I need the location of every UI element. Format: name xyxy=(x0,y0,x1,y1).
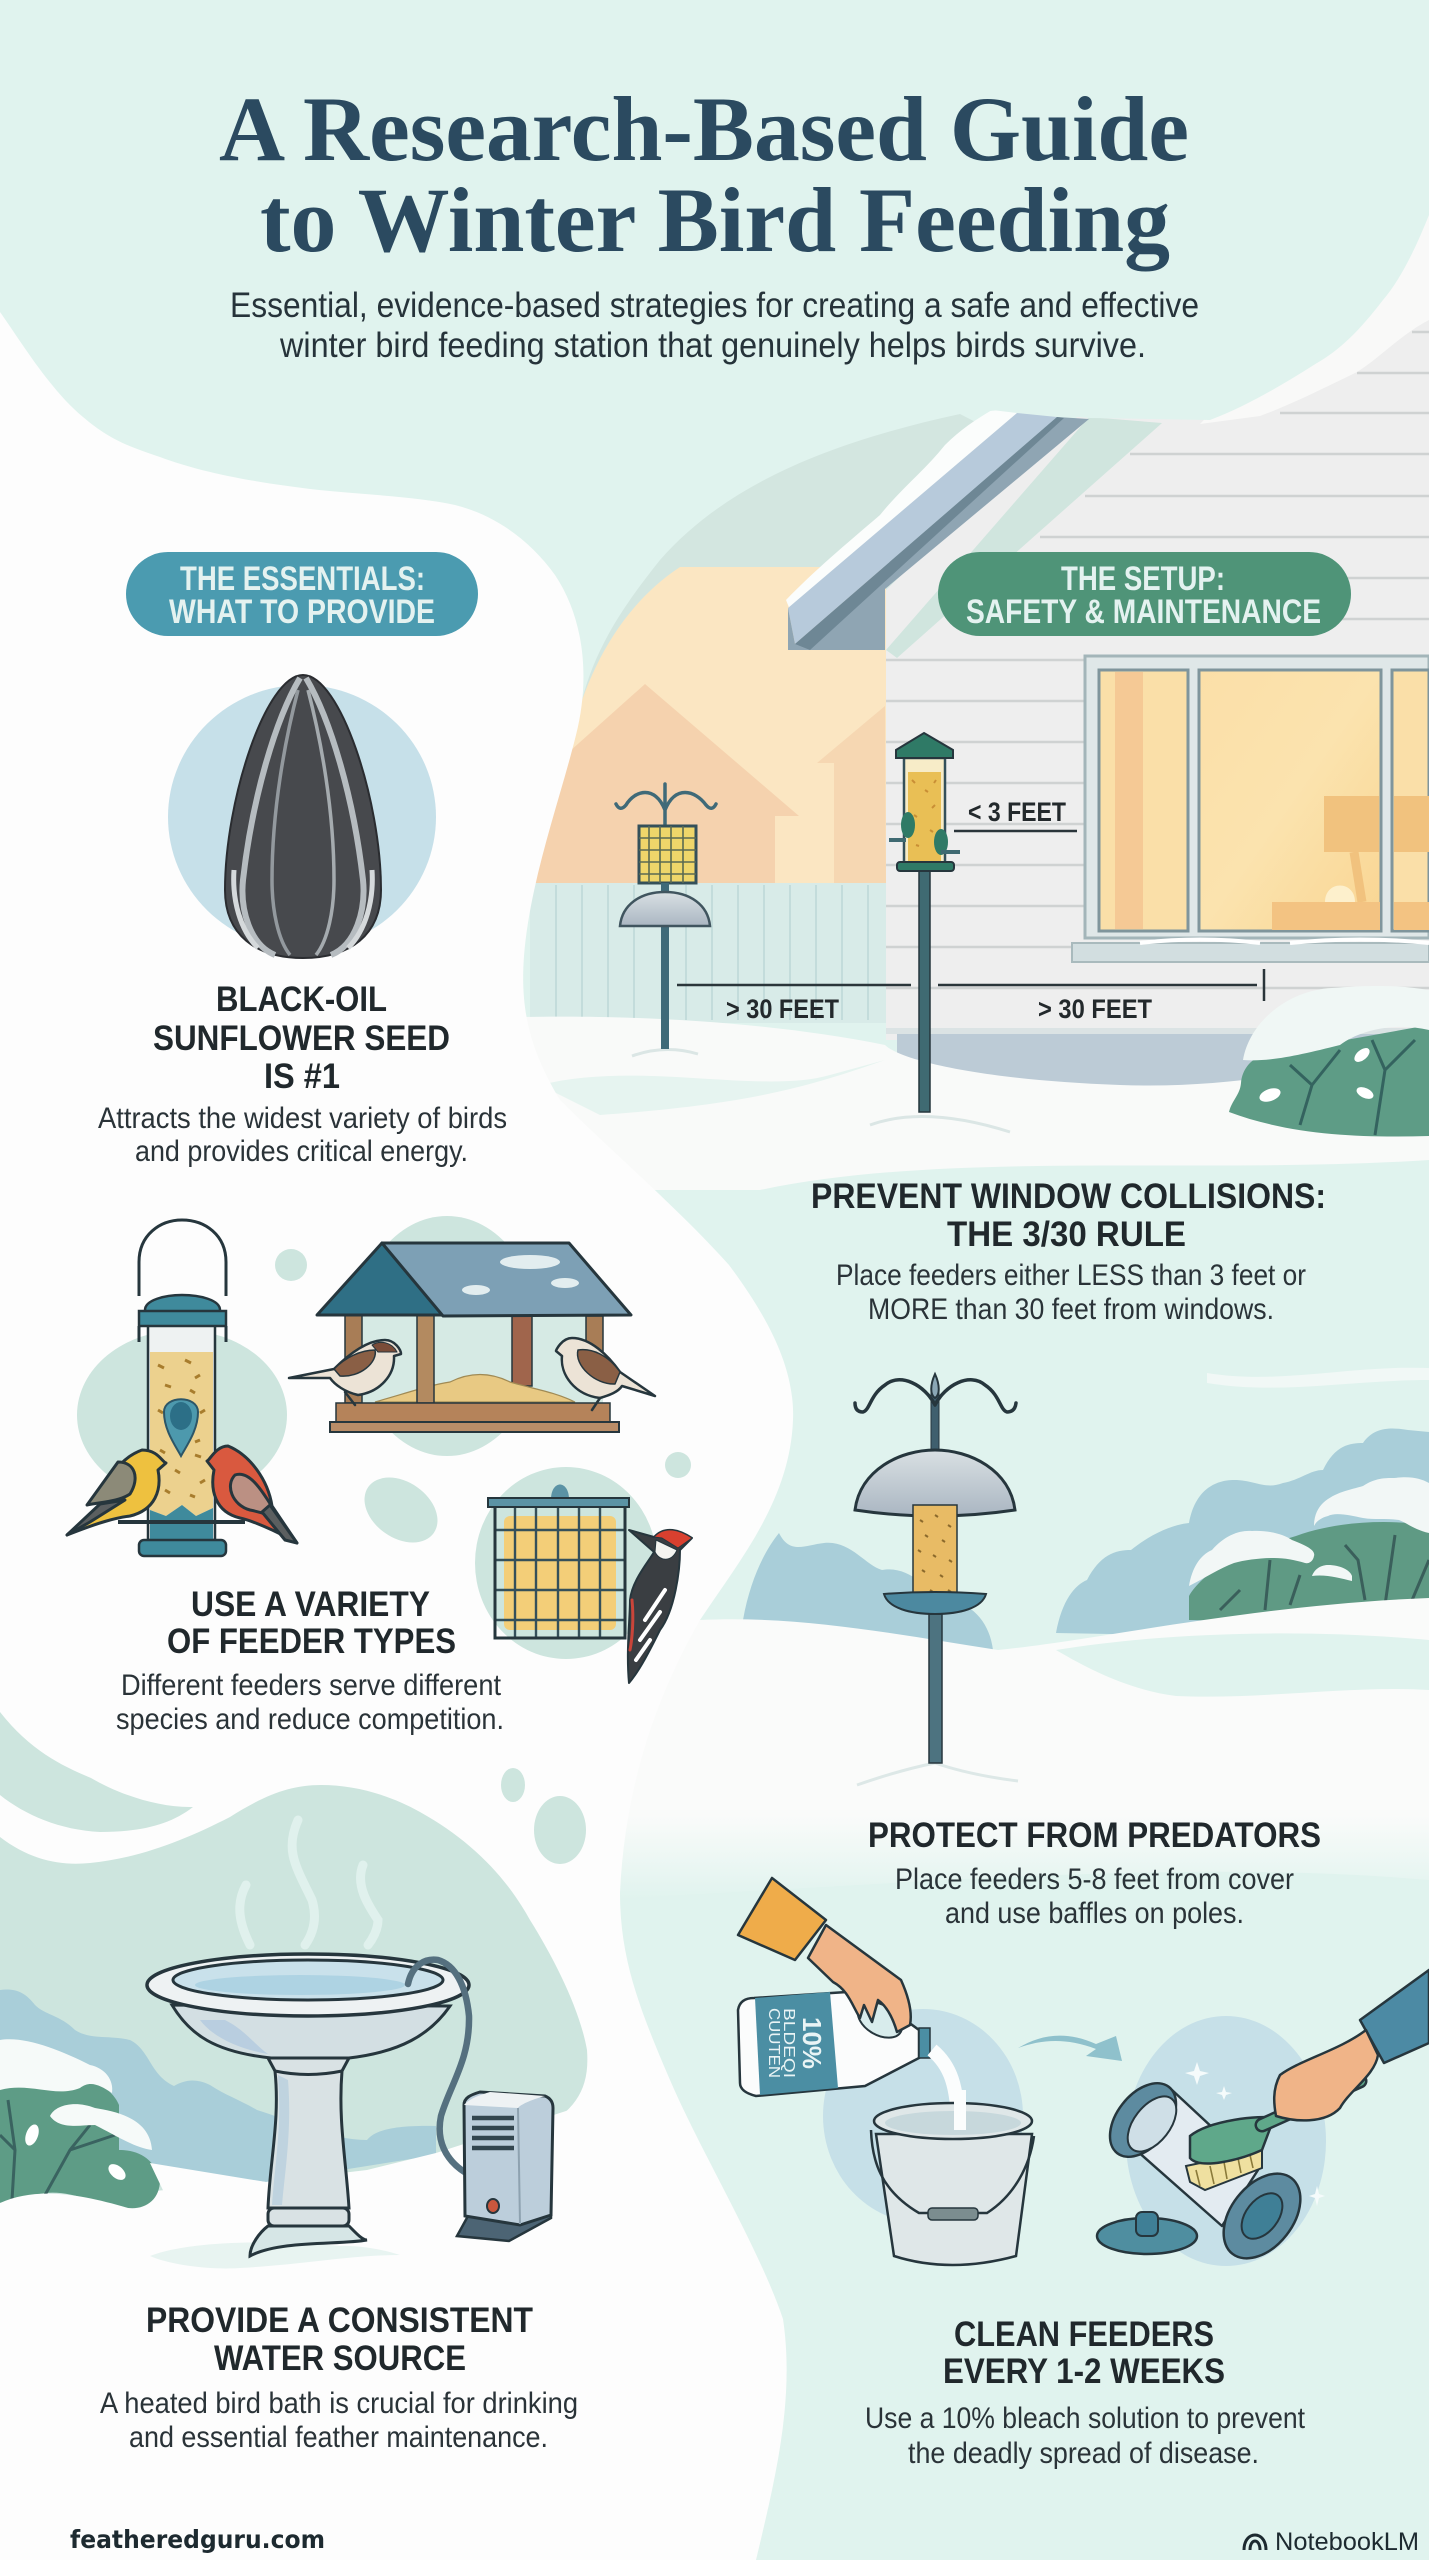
distant house 1 xyxy=(530,684,799,883)
distant hills xyxy=(0,1990,436,2200)
bird: woodpecker xyxy=(628,1530,692,1683)
small blobs xyxy=(501,1768,525,1802)
mound xyxy=(870,1116,1010,1132)
footer: notebooklm logo: NotebookLM xyxy=(1275,2528,1419,2556)
house wall xyxy=(886,150,1429,1040)
roof xyxy=(786,410,1089,650)
sky shade xyxy=(582,414,1030,700)
heading: black-oil sunflower seed: BLACK-OIL xyxy=(216,980,387,1019)
label: less than 3 feet: < 3 FEET xyxy=(968,797,1066,827)
arrow xyxy=(1018,2036,1122,2061)
lamp and desk xyxy=(1272,796,1429,930)
text: sunflower description: and provides critical energy. xyxy=(135,1135,468,1168)
text: predators description: Place feeders 5-8 feet from cover xyxy=(895,1863,1294,1896)
distant sky glow xyxy=(530,567,886,883)
label: more than 30 feet left: > 30 FEET xyxy=(726,994,839,1024)
pill: the essentials: WHAT TO PROVIDE xyxy=(169,593,435,631)
pane left xyxy=(1099,670,1188,931)
tube xyxy=(1136,2090,1258,2226)
near window feeder xyxy=(870,733,1010,1132)
steam xyxy=(240,1820,378,1945)
hooks xyxy=(616,784,716,828)
text: predators description: and use baffles on poles. xyxy=(945,1897,1244,1930)
pour stream xyxy=(932,2050,958,2130)
title xyxy=(219,78,1189,271)
text: clean description: Use a 10% bleach solution to prevent xyxy=(865,2402,1306,2435)
title: A Research-Based Guide xyxy=(219,78,1189,180)
pill: the setup: SAFETY & MAINTENANCE xyxy=(966,593,1321,631)
pill: the essentials xyxy=(126,552,478,636)
mound xyxy=(857,1763,1018,1785)
feeder roof xyxy=(896,733,953,758)
snow hollow xyxy=(1056,1633,1429,1697)
left white panel xyxy=(0,312,793,2560)
heading: window collisions: THE 3/30 RULE xyxy=(947,1215,1186,1254)
handle opening xyxy=(852,1995,908,2045)
pane right xyxy=(1392,670,1429,931)
sleeve xyxy=(1360,1970,1429,2063)
subtitle xyxy=(230,286,1199,365)
bird: sparrow left xyxy=(289,1340,401,1405)
cap xyxy=(1097,2212,1197,2254)
snow caps xyxy=(1189,1531,1314,1586)
snow mound xyxy=(0,2194,420,2280)
fence xyxy=(530,883,886,1023)
rim xyxy=(147,1954,469,2016)
text: window description: MORE than 30 feet from windows. xyxy=(868,1293,1274,1326)
pedestal xyxy=(268,2071,349,2208)
heater xyxy=(457,2092,553,2241)
brush xyxy=(1186,2081,1360,2190)
heading: black-oil sunflower seed: IS #1 xyxy=(264,1057,340,1096)
text: sunflower description: Attracts the widest variety of birds xyxy=(98,1102,507,1135)
snow shadows xyxy=(540,1060,885,1115)
icon: scrubbing feeder tube xyxy=(1097,1970,1429,2273)
lower right snowy backdrop xyxy=(600,1368,1429,1900)
heading: black-oil sunflower seed: SUNFLOWER SEED xyxy=(153,1019,450,1058)
distant hills right xyxy=(1056,1428,1429,1640)
distant hills left xyxy=(700,1533,993,1650)
house foundation xyxy=(897,1031,1429,1091)
title: to Winter Bird Feeding xyxy=(260,169,1170,271)
bottle: 10% xyxy=(797,2017,827,2069)
far feeder pole xyxy=(616,784,716,1056)
text: feeder description: Different feeders serve different xyxy=(121,1669,502,1702)
heading: use a variety of feeder types: USE A VARIETY xyxy=(191,1585,430,1624)
bird: house finch xyxy=(207,1446,297,1543)
roof snow xyxy=(786,410,1017,610)
bucket xyxy=(876,2134,1032,2265)
icon: heated bird bath xyxy=(147,1820,553,2256)
suet cage feeder xyxy=(488,1484,629,1638)
text: feeder description: species and reduce competition. xyxy=(116,1703,504,1736)
feeder ports xyxy=(901,812,915,838)
bottle: BLDEQI xyxy=(780,2008,797,2078)
icon: baffled pole feeder xyxy=(855,1374,1018,1785)
heading: use a variety of feeder types: OF FEEDER TYPES xyxy=(167,1622,456,1661)
bowl xyxy=(172,2005,450,2058)
heading: clean feeders xyxy=(943,2315,1225,2391)
seed pile xyxy=(375,1374,575,1402)
pill: the setup xyxy=(938,552,1351,636)
tube feeder xyxy=(118,1220,245,1556)
heading: use a variety of feeder types xyxy=(167,1585,456,1661)
swirl xyxy=(0,1712,193,1832)
pill: the essentials: THE ESSENTIALS: xyxy=(180,560,425,598)
suet cage xyxy=(639,826,696,883)
hand xyxy=(808,1925,911,2032)
streaks xyxy=(1207,1368,1429,1388)
tray xyxy=(884,1592,986,1614)
bottom-left backdrop xyxy=(0,1712,620,2300)
icon: sunflower seed xyxy=(168,675,436,958)
bottle xyxy=(738,1992,930,2096)
hand xyxy=(1274,2030,1378,2120)
text: feeder description xyxy=(116,1669,504,1736)
heading: predators: PROTECT FROM PREDATORS xyxy=(868,1816,1321,1855)
main blob xyxy=(0,1785,587,2205)
subtitle: winter bird feeding station that genuinely helps birds survive. xyxy=(279,326,1146,365)
text: clean description: the deadly spread of disease. xyxy=(908,2437,1259,2470)
sparkles xyxy=(1185,2062,1325,2206)
seed tube xyxy=(913,1505,957,1600)
bush xyxy=(0,2039,160,2208)
text: water description xyxy=(100,2387,578,2454)
cord xyxy=(408,1960,469,2173)
distant house 2 xyxy=(817,706,886,883)
text: predators description xyxy=(895,1863,1294,1930)
mound xyxy=(632,1049,698,1056)
bush snow xyxy=(0,2039,112,2093)
snow ground xyxy=(524,1017,1429,1190)
right flange xyxy=(1208,2159,1316,2273)
heading: clean feeders: CLEAN FEEDERS xyxy=(954,2315,1214,2354)
text: sunflower description xyxy=(98,1102,507,1168)
text: window description xyxy=(836,1259,1306,1326)
bottle: CUUTEN xyxy=(765,2008,782,2078)
roof soffit dark xyxy=(788,417,1089,650)
label: more than 30 feet right: > 30 FEET xyxy=(1038,994,1152,1024)
icons: feeder types xyxy=(67,1216,692,1683)
baffle xyxy=(620,892,710,926)
siding lines xyxy=(886,332,1429,988)
heading: water source: PROVIDE A CONSISTENT xyxy=(146,2301,533,2340)
green bush xyxy=(1189,1477,1429,1625)
platform feeder xyxy=(317,1243,631,1432)
heading: clean feeders: EVERY 1-2 WEEKS xyxy=(943,2352,1225,2391)
heading: water source xyxy=(146,2301,533,2378)
window sill xyxy=(1072,943,1429,962)
footer: website: featheredguru.com xyxy=(70,2525,325,2554)
pane middle xyxy=(1199,670,1381,931)
text: water description: A heated bird bath is crucial for drinking xyxy=(100,2387,578,2420)
window xyxy=(1072,656,1429,962)
wall shadow from roof xyxy=(886,417,1162,658)
text: window description: Place feeders either LESS than 3 feet or xyxy=(836,1259,1306,1292)
top mint header shape xyxy=(0,0,1429,450)
background blobs xyxy=(77,1216,691,1659)
bush snow cap xyxy=(1243,986,1429,1060)
heading: window collisions: PREVENT WINDOW COLLISIONS: xyxy=(811,1177,1326,1216)
left flange xyxy=(1097,2071,1189,2169)
heading: water source: WATER SOURCE xyxy=(214,2339,466,2378)
label: more than 30 feet right xyxy=(938,969,1264,1024)
icon: pouring bleach into bucket xyxy=(738,1878,1034,2265)
text: water description: and essential feather maintenance. xyxy=(129,2421,548,2454)
hooks xyxy=(931,1374,939,1398)
bird: sparrow right xyxy=(556,1338,655,1410)
pill: the setup: THE SETUP: xyxy=(1061,560,1225,598)
baffle dome xyxy=(855,1450,1015,1516)
snow hill xyxy=(600,1598,1429,1900)
scene: house and yard xyxy=(524,150,1429,1190)
text: clean description xyxy=(865,2402,1306,2470)
subtitle: Essential, evidence-based strategies for creating a safe and effective xyxy=(230,286,1199,325)
heading: window collisions xyxy=(811,1177,1326,1254)
bird: goldfinch xyxy=(67,1450,166,1535)
sleeve xyxy=(738,1878,826,1960)
bush xyxy=(1229,986,1429,1137)
heading: black-oil sunflower seed xyxy=(153,980,450,1096)
roof fascia light xyxy=(788,413,1057,644)
white band along header xyxy=(1200,190,1429,424)
